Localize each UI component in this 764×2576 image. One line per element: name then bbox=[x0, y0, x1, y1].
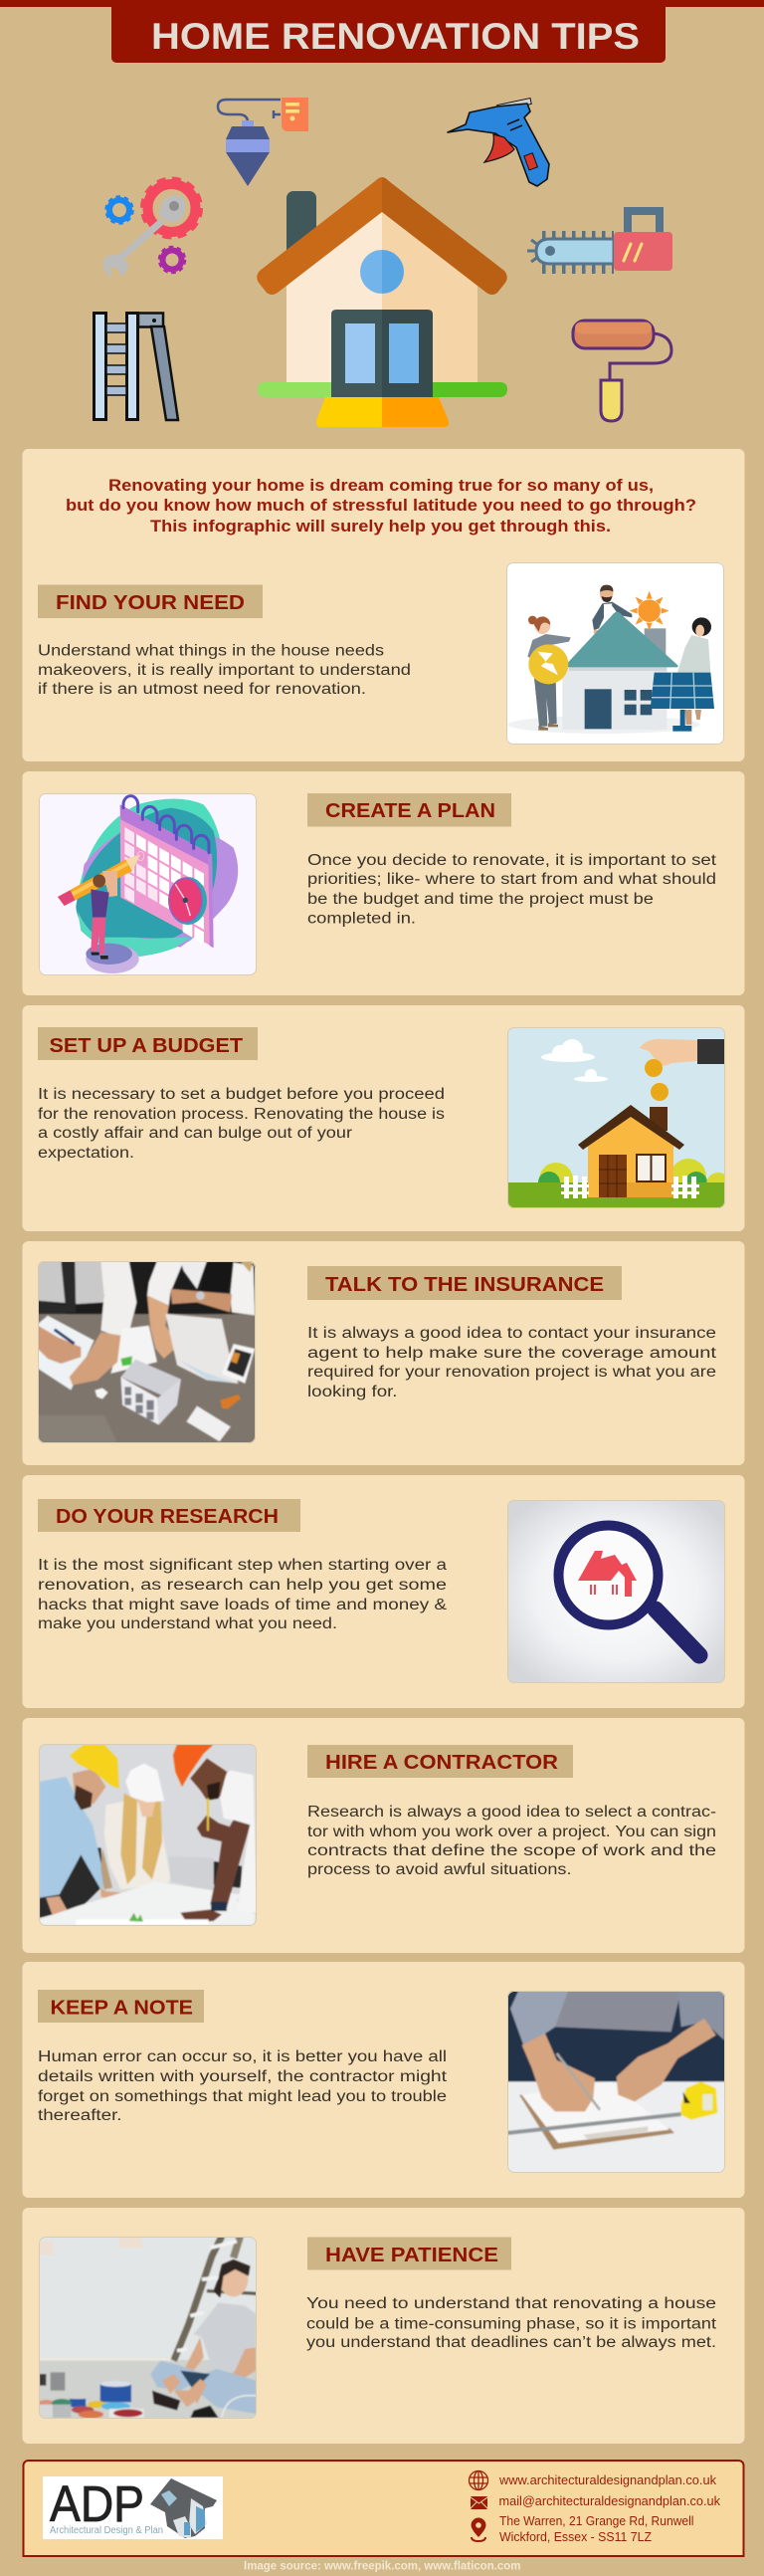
panel: have patience bbox=[22, 2208, 744, 2444]
body text: create a plan: Once you decide to renovate, it is important to set bbox=[307, 852, 717, 869]
body text: find your need: Understand what things in the house needs bbox=[38, 643, 384, 659]
body text: keep a note bbox=[38, 2048, 448, 2124]
body text: create a plan: completed in. bbox=[307, 910, 416, 928]
image source caption: Image source: www.freepik.com, www.flaticon.com bbox=[244, 2560, 521, 2572]
body text: hire a contractor: process to avoid awful situations. bbox=[307, 1861, 571, 1878]
body text: create a plan bbox=[307, 852, 717, 928]
panel: intro and find your need bbox=[22, 449, 744, 761]
address bbox=[499, 2513, 694, 2544]
photo: three contractors in hard hats bbox=[38, 1742, 259, 1928]
body text: hire a contractor: Research is always a good idea to select a contrac- bbox=[307, 1804, 716, 1821]
body text: keep a note: details written with yourself, the contractor might bbox=[38, 2068, 448, 2085]
panel: hire a contractor bbox=[22, 1718, 744, 1953]
heading: set up a budget: SET UP A BUDGET bbox=[50, 1035, 243, 1057]
body text: create a plan: priorities; like- where to start from and what should bbox=[307, 871, 716, 888]
intro text: Renovating your home is dream coming true for so many of us, bbox=[108, 477, 654, 495]
heading: talk to the insurance bbox=[307, 1266, 622, 1300]
body text: keep a note: thereafter. bbox=[38, 2107, 121, 2124]
photo: signing insurance papers bbox=[38, 1259, 259, 1445]
body text: hire a contractor: contracts that define the scope of work and the bbox=[307, 1842, 716, 1859]
intro text: This infographic will surely help you get through this. bbox=[150, 518, 611, 536]
photo: man writing on a clipboard bbox=[505, 1989, 726, 2175]
heading: find your need bbox=[38, 585, 263, 618]
logo: ADP bbox=[43, 2475, 223, 2539]
body text: have patience: could be a time-consuming phase, so it is important bbox=[306, 2315, 717, 2333]
body text: hire a contractor bbox=[307, 1804, 716, 1878]
panel: create a plan bbox=[22, 771, 744, 995]
intro text: but do you know how much of stressful latitude you need to go through? bbox=[66, 497, 696, 515]
intro text bbox=[66, 477, 696, 536]
body text: talk to the insurance: looking for. bbox=[307, 1384, 398, 1400]
logo: ADP: Architectural Design & Plan bbox=[50, 2525, 163, 2536]
panel: set up a budget bbox=[22, 1005, 744, 1231]
panel: do your research bbox=[22, 1475, 744, 1708]
heading: have patience: HAVE PATIENCE bbox=[325, 2245, 498, 2266]
icon: gears and wrench bbox=[102, 179, 201, 278]
body text: have patience: You need to understand that renovating a house bbox=[306, 2295, 716, 2312]
image: coins dropping into a house bbox=[507, 1027, 730, 1208]
panel: keep a note bbox=[22, 1962, 744, 2198]
heading: create a plan bbox=[307, 793, 511, 826]
heading: keep a note: KEEP A NOTE bbox=[50, 1997, 193, 2019]
body text: hire a contractor: tor with whom you work over a project. You can sign bbox=[307, 1824, 716, 1840]
photo: woman sitting with paint cans bbox=[38, 2235, 259, 2421]
icon: stepladder bbox=[94, 313, 178, 420]
logo: ADP: ADP bbox=[50, 2475, 144, 2532]
body text: keep a note: Human error can occur so, it is better you have all bbox=[38, 2048, 447, 2065]
address: Wickford, Essex - SS11 7LZ bbox=[499, 2529, 652, 2544]
heading: do your research bbox=[38, 1499, 300, 1532]
body text: do your research: It is the most significant step when starting over a bbox=[38, 1557, 447, 1574]
body text: set up a budget: It is necessary to set a budget before you proceed bbox=[38, 1086, 445, 1103]
body text: have patience: you understand that deadlines can’t be always met. bbox=[306, 2334, 716, 2351]
heading: create a plan: CREATE A PLAN bbox=[325, 800, 495, 822]
body text: find your need bbox=[38, 643, 411, 698]
heading: hire a contractor: HIRE A CONTRACTOR bbox=[325, 1752, 559, 1774]
body text: talk to the insurance: agent to help make sure the coverage amount bbox=[307, 1345, 717, 1362]
body text: talk to the insurance: required for your renovation project is what you are bbox=[307, 1364, 716, 1381]
heading: set up a budget bbox=[38, 1027, 258, 1060]
body text: set up a budget: expectation. bbox=[38, 1145, 134, 1162]
image: family and solar house bbox=[504, 560, 725, 747]
website: www.architecturaldesignandplan.co.uk bbox=[498, 2472, 716, 2487]
icon: central house bbox=[257, 177, 507, 427]
title banner bbox=[111, 0, 666, 63]
icon: paint roller bbox=[573, 321, 671, 421]
panel: talk to the insurance bbox=[22, 1241, 744, 1465]
heading: do your research: DO YOUR RESEARCH bbox=[56, 1506, 279, 1528]
body text: have patience bbox=[306, 2295, 717, 2351]
icon: chainsaw bbox=[527, 211, 672, 271]
icon: glue gun bbox=[448, 99, 549, 186]
image: magnifying glass over house bbox=[507, 1500, 725, 1683]
icon: plumb bob bbox=[218, 98, 308, 186]
icon: location pin bbox=[472, 2518, 485, 2541]
body text: keep a note: forget on somethings that might lead you to trouble bbox=[38, 2088, 447, 2105]
body text: do your research bbox=[38, 1557, 448, 1632]
icon: globe bbox=[470, 2470, 487, 2490]
icon: envelope bbox=[471, 2496, 487, 2509]
heading: have patience bbox=[307, 2238, 511, 2269]
body text: talk to the insurance bbox=[307, 1325, 717, 1400]
panel: footer contact bbox=[24, 2461, 744, 2556]
body text: find your need: if there is an utmost need for renovation. bbox=[38, 681, 366, 698]
title banner: HOME RENOVATION TIPS bbox=[151, 16, 640, 57]
address: The Warren, 21 Grange Rd, Runwell bbox=[499, 2513, 694, 2528]
heading: find your need: FIND YOUR NEED bbox=[56, 592, 245, 614]
body text: create a plan: be the budget and time the project must be bbox=[307, 891, 654, 908]
body text: talk to the insurance: It is always a good idea to contact your insurance bbox=[307, 1325, 716, 1342]
heading: keep a note bbox=[38, 1990, 204, 2023]
body text: set up a budget bbox=[38, 1086, 445, 1162]
heading: hire a contractor bbox=[307, 1745, 573, 1778]
heading: talk to the insurance: TALK TO THE INSURANCE bbox=[325, 1274, 604, 1296]
body text: do your research: renovation, as research can help you get some bbox=[38, 1577, 447, 1594]
email: mail@architecturaldesignandplan.co.uk bbox=[499, 2493, 720, 2508]
body text: do your research: make you understand what you need. bbox=[38, 1615, 337, 1632]
body text: set up a budget: for the renovation process. Renovating the house is bbox=[38, 1106, 445, 1123]
body text: set up a budget: a costly affair and can bulge out of your bbox=[38, 1125, 352, 1142]
body text: find your need: makeovers, it is really important to understand bbox=[38, 662, 411, 679]
image: calendar and pencil bbox=[38, 791, 259, 977]
body text: do your research: hacks that might save loads of time and money & bbox=[38, 1597, 448, 1613]
